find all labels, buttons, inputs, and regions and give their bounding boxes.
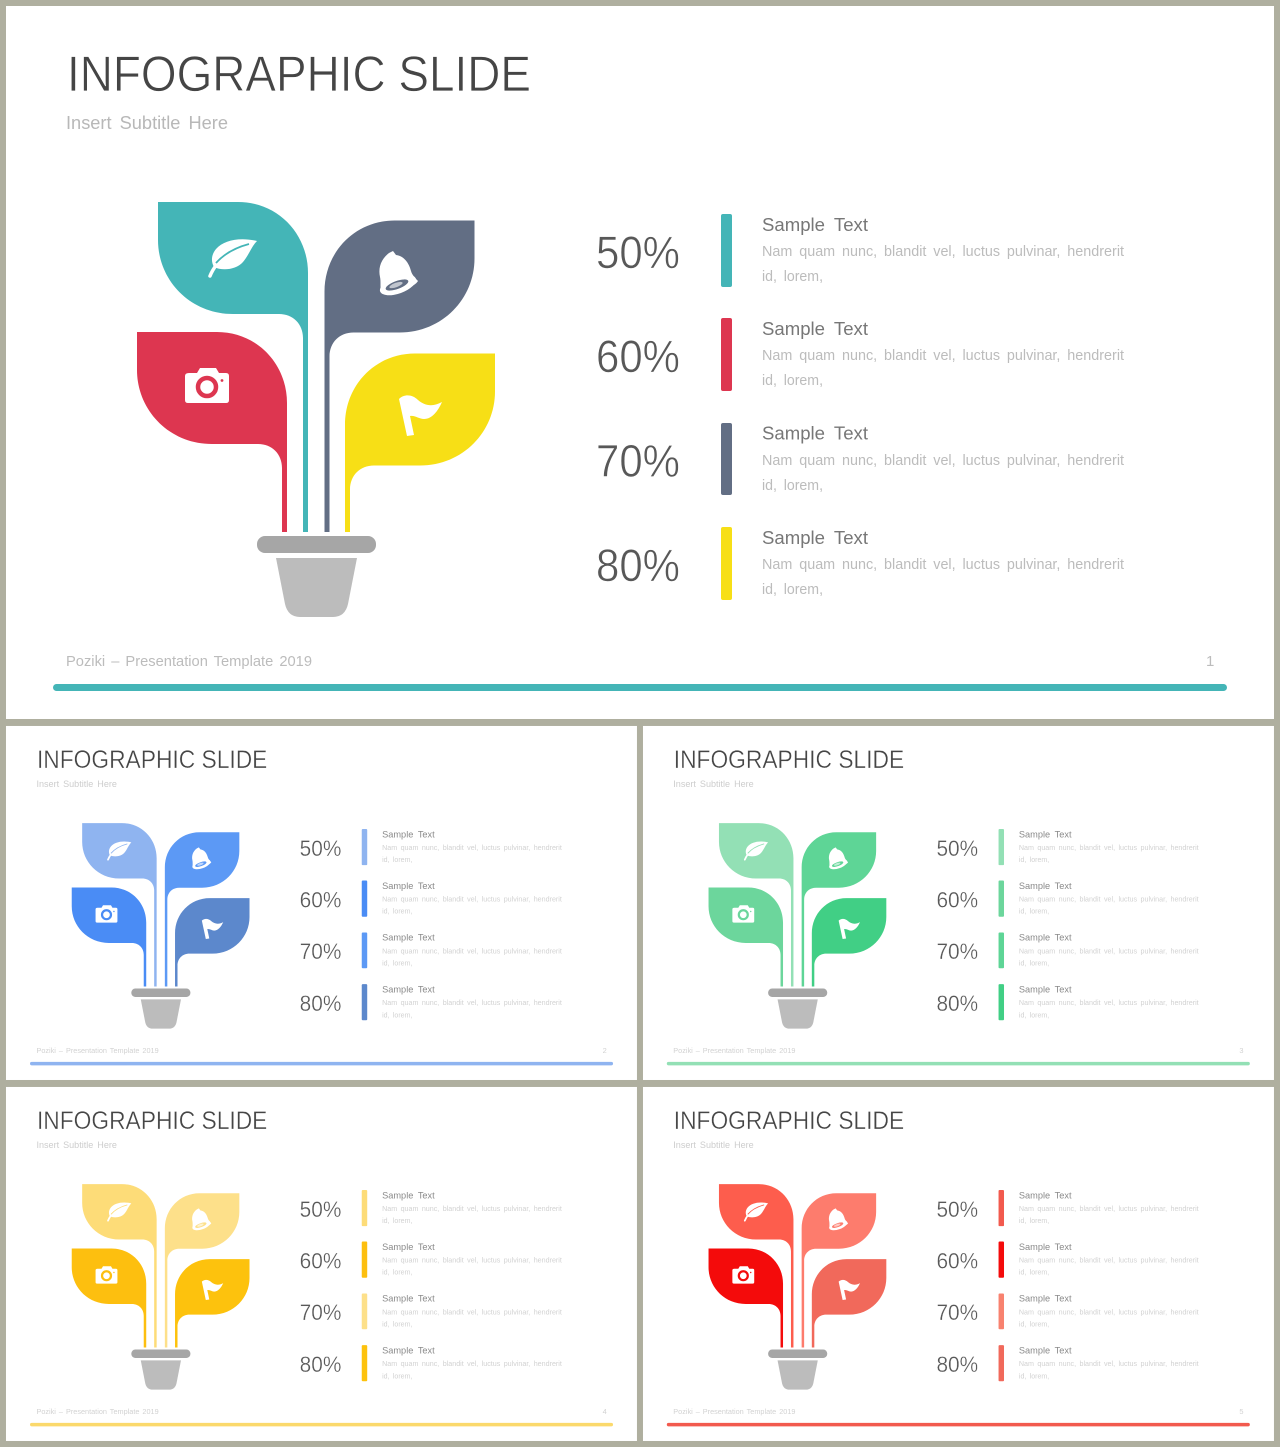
row: 60%: Nam quam nunc, blandit vel, luctus pulvinar, hendrerit (1019, 1255, 1200, 1264)
leaf: bell (802, 832, 876, 987)
row: 80%: 80% (300, 1352, 342, 1377)
row: 50%: Nam quam nunc, blandit vel, luctus pulvinar, hendrerit (1019, 1204, 1200, 1213)
row: 80%: Nam quam nunc, blandit vel, luctus pulvinar, hendrerit (1019, 1359, 1200, 1368)
title: INFOGRAPHIC SLIDE (674, 747, 904, 774)
subtitle: Insert Subtitle Here (66, 113, 228, 133)
row: 70%: 70% (300, 1300, 342, 1325)
row: 80%: Nam quam nunc, blandit vel, luctus pulvinar, hendrerit (382, 998, 563, 1007)
row: 80%: id, lorem, (382, 1371, 412, 1380)
leaf: camera (709, 1248, 783, 1348)
flower pot (768, 989, 827, 1029)
row: 60%: 60% (936, 1248, 978, 1273)
row: 70% (936, 1294, 1200, 1329)
row: 60%: 60% (300, 887, 342, 912)
flower pot (131, 989, 190, 1029)
slide background (6, 1087, 637, 1441)
flower pot (131, 1350, 190, 1390)
row: 80%: Sample Text (762, 528, 868, 548)
title: INFOGRAPHIC SLIDE (67, 46, 531, 102)
leaf: bell (165, 1193, 239, 1348)
row: 70%: 70% (936, 1300, 978, 1325)
row: 50%: id, lorem, (382, 855, 412, 864)
row: 80%: id, lorem, (762, 581, 823, 598)
row: 80%: 80% (936, 1352, 978, 1377)
row: 70%: Sample Text (762, 424, 868, 444)
row: 70%: 70% (300, 939, 342, 964)
row: 60% (936, 881, 1200, 917)
row: 50% (936, 1190, 1200, 1226)
row: 60%: Nam quam nunc, blandit vel, luctus pulvinar, hendrerit (1019, 894, 1200, 903)
subtitle: Insert Subtitle Here (673, 1140, 754, 1150)
row: 70%: Nam quam nunc, blandit vel, luctus pulvinar, hendrerit (382, 1307, 563, 1316)
row: 80%: Sample Text (382, 1346, 435, 1355)
row: 70%: id, lorem, (1019, 1320, 1049, 1329)
row: 60%: Nam quam nunc, blandit vel, luctus pulvinar, hendrerit (762, 347, 1125, 364)
row: 70%: id, lorem, (762, 477, 823, 494)
row: 80%: 80% (936, 991, 978, 1016)
subtitle: Insert Subtitle Here (36, 779, 117, 789)
row: 80%: Sample Text (1019, 1346, 1072, 1355)
panel: main slide (6, 6, 1274, 719)
panel: red slide (643, 1087, 1274, 1441)
row: 80%: Nam quam nunc, blandit vel, luctus pulvinar, hendrerit (382, 1359, 563, 1368)
footer text: Poziki – Presentation Template 2019 (673, 1046, 795, 1055)
row: 80%: Sample Text (1019, 985, 1072, 994)
footer bar (53, 684, 1227, 691)
footer bar (30, 1062, 613, 1065)
row: 70%: Sample Text (382, 933, 435, 943)
row: 70%: 70% (596, 436, 680, 486)
row: 70%: Sample Text (1019, 1294, 1072, 1304)
row: 70%: Nam quam nunc, blandit vel, luctus pulvinar, hendrerit (382, 946, 563, 955)
row: 70% (936, 933, 1200, 968)
row: 60%: id, lorem, (382, 907, 412, 916)
row: 60%: Nam quam nunc, blandit vel, luctus pulvinar, hendrerit (382, 894, 563, 903)
row: 50% (300, 1190, 563, 1226)
row: 80%: Nam quam nunc, blandit vel, luctus pulvinar, hendrerit (1019, 998, 1200, 1007)
row: 60%: id, lorem, (382, 1268, 412, 1277)
row: 80% (936, 984, 1200, 1020)
row: 60% (300, 1242, 563, 1278)
footer bar (667, 1423, 1250, 1426)
leaf: bell (324, 220, 474, 532)
title: INFOGRAPHIC SLIDE (37, 1108, 267, 1135)
footer text: Poziki – Presentation Template 2019 (673, 1407, 795, 1416)
row: 70%: Sample Text (382, 1294, 435, 1304)
row: 60%: id, lorem, (762, 372, 823, 389)
row: 50%: Nam quam nunc, blandit vel, luctus pulvinar, hendrerit (382, 843, 563, 852)
row: 50%: id, lorem, (382, 1216, 412, 1225)
leaf: flag (175, 1259, 250, 1348)
plant illustration (709, 1184, 886, 1390)
row: 50%: Nam quam nunc, blandit vel, luctus pulvinar, hendrerit (762, 243, 1125, 260)
flower pot (768, 1350, 827, 1390)
row: 50%: Sample Text (1019, 1190, 1072, 1200)
leaf: camera (72, 1248, 146, 1348)
leaf: bell (802, 1193, 876, 1348)
row: 50%: 50% (300, 1197, 342, 1222)
row: 70% (596, 423, 1125, 495)
page number: 3 (1239, 1046, 1244, 1055)
title: INFOGRAPHIC SLIDE (674, 1108, 904, 1135)
panel: blue slide (6, 726, 637, 1080)
row: 70%: id, lorem, (382, 1320, 412, 1329)
row: 70%: Nam quam nunc, blandit vel, luctus pulvinar, hendrerit (762, 452, 1125, 469)
row: 50%: 50% (596, 227, 680, 278)
subtitle: Insert Subtitle Here (36, 1140, 117, 1150)
row: 60%: Sample Text (382, 1242, 435, 1252)
leaf: nature (719, 1184, 793, 1348)
row: 50%: Sample Text (382, 1190, 435, 1200)
row: 60%: 60% (936, 887, 978, 912)
slide background (6, 6, 1274, 719)
subtitle: Insert Subtitle Here (673, 779, 754, 789)
page number: 1 (1206, 653, 1214, 670)
page number: 2 (603, 1046, 607, 1055)
footer text: Poziki – Presentation Template 2019 (36, 1046, 159, 1055)
row: 70%: 70% (936, 939, 978, 964)
plant illustration (137, 202, 495, 617)
row: 70%: Nam quam nunc, blandit vel, luctus pulvinar, hendrerit (1019, 946, 1200, 955)
row: 80%: id, lorem, (1019, 1010, 1049, 1019)
title: INFOGRAPHIC SLIDE (37, 747, 267, 774)
leaf: nature (82, 1184, 157, 1348)
leaf: nature (719, 823, 793, 987)
row: 50%: 50% (936, 1197, 978, 1222)
row: 70%: Nam quam nunc, blandit vel, luctus pulvinar, hendrerit (1019, 1307, 1200, 1316)
row: 50%: 50% (300, 836, 342, 861)
plant illustration (72, 1184, 250, 1390)
leaf: nature (82, 823, 157, 987)
row: 80% (300, 984, 563, 1020)
page number: 5 (1239, 1407, 1244, 1416)
row: 60%: 60% (300, 1248, 342, 1273)
row: 50%: 50% (936, 836, 978, 861)
row: 70% (300, 933, 563, 968)
row: 50%: Nam quam nunc, blandit vel, luctus pulvinar, hendrerit (382, 1204, 563, 1213)
row: 80%: id, lorem, (1019, 1371, 1049, 1380)
row: 60% (936, 1242, 1200, 1278)
leaf: flag (812, 898, 886, 987)
row: 50%: Sample Text (762, 215, 868, 235)
leaf: camera (72, 887, 146, 987)
row: 60%: Sample Text (1019, 881, 1072, 891)
leaf: flag (812, 1259, 886, 1348)
row: 50%: Sample Text (1019, 829, 1072, 839)
slide background (6, 726, 637, 1080)
row: 70%: Sample Text (1019, 933, 1072, 943)
leaf: camera (709, 887, 783, 987)
row: 80% (300, 1345, 563, 1381)
row: 50% (596, 214, 1125, 287)
panel: yellow slide (6, 1087, 637, 1441)
footer text: Poziki – Presentation Template 2019 (36, 1407, 159, 1416)
row: 80% (936, 1345, 1200, 1381)
footer bar (667, 1062, 1250, 1065)
footer text: Poziki – Presentation Template 2019 (66, 653, 312, 670)
row: 60%: Sample Text (382, 881, 435, 891)
leaf: flag (175, 898, 250, 987)
row: 60%: id, lorem, (1019, 1268, 1049, 1277)
row: 50% (936, 829, 1200, 865)
leaf: flag (345, 354, 495, 532)
row: 50%: Sample Text (382, 829, 435, 839)
panel: green slide (643, 726, 1274, 1080)
row: 70%: id, lorem, (382, 959, 412, 968)
footer bar (30, 1423, 613, 1426)
leaf: nature (158, 202, 308, 532)
row: 70% (300, 1294, 563, 1329)
row: 60%: Nam quam nunc, blandit vel, luctus pulvinar, hendrerit (382, 1255, 563, 1264)
flower pot (257, 536, 376, 617)
row: 50%: id, lorem, (1019, 855, 1049, 864)
plant illustration (72, 823, 250, 1029)
leaf: bell (165, 832, 239, 987)
row: 80%: 80% (300, 991, 342, 1016)
row: 80%: 80% (596, 540, 680, 591)
row: 50%: Nam quam nunc, blandit vel, luctus pulvinar, hendrerit (1019, 843, 1200, 852)
row: 60%: id, lorem, (1019, 907, 1049, 916)
plant illustration (709, 823, 886, 1029)
slide background (643, 1087, 1274, 1441)
row: 60%: Sample Text (1019, 1242, 1072, 1252)
row: 60% (300, 881, 563, 917)
leaf: camera (137, 332, 287, 532)
row: 50%: id, lorem, (762, 268, 823, 285)
row: 80% (596, 527, 1125, 600)
row: 60%: 60% (596, 331, 680, 382)
row: 50% (300, 829, 563, 865)
row: 80%: Sample Text (382, 985, 435, 994)
row: 60%: Sample Text (762, 319, 868, 339)
row: 60% (596, 318, 1125, 391)
row: 80%: Nam quam nunc, blandit vel, luctus pulvinar, hendrerit (762, 556, 1125, 573)
row: 50%: id, lorem, (1019, 1216, 1049, 1225)
row: 80%: id, lorem, (382, 1010, 412, 1019)
page number: 4 (603, 1407, 607, 1416)
slide background (643, 726, 1274, 1080)
row: 70%: id, lorem, (1019, 959, 1049, 968)
